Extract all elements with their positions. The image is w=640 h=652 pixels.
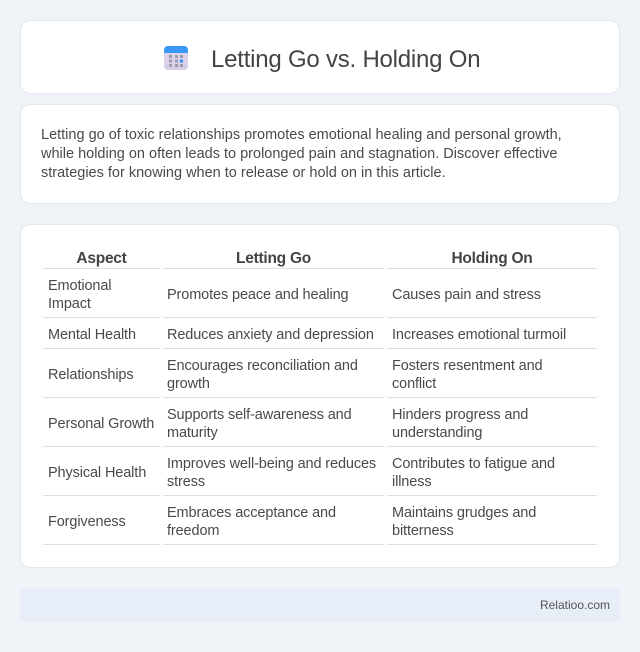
table header: Holding On: Holding On [451,250,532,267]
cell: Maintains grudges and [392,505,536,521]
cell: stress [167,474,205,490]
cell: conflict [392,376,436,392]
cell: Supports self-awareness and [167,407,352,423]
text block: introduction [41,127,562,181]
cell: illness [392,474,431,490]
cell: growth [167,376,210,392]
cell [392,456,555,490]
row: Mental Health: Mental Health [48,327,136,343]
cell [167,358,358,392]
row: Emotional Impact: Emotional [48,278,111,294]
cell [167,407,352,441]
cell [392,505,536,539]
row: Forgiveness: Forgiveness [48,514,126,530]
cell: Hinders progress and [392,407,528,423]
row: Relationships: Relationships [48,367,134,383]
panel: introduction [20,104,620,204]
panel: header [20,20,620,94]
cell [392,407,528,441]
cell: Contributes to fatigue and [392,456,555,472]
cell [167,456,376,490]
cell: understanding [392,425,482,441]
cell: maturity [167,425,218,441]
title: Letting Go vs. Holding On [211,46,480,73]
table header: Letting Go: Letting Go [236,250,311,267]
row: Emotional Impact: Impact [48,296,91,312]
cell [167,505,336,539]
text block: introduction: while holding on often leads to prolonged pain and stagnation. Discover effective [41,146,557,162]
cell: Fosters resentment and [392,358,542,374]
cell: bitterness [392,523,454,539]
cell: Causes pain and stress [392,287,541,303]
footer [20,588,620,622]
row: Emotional Impact [48,278,111,312]
cell: Encourages reconciliation and [167,358,358,374]
cell [392,358,542,392]
table header: Aspect: Aspect [76,250,127,267]
footer credit: Relatioo.com [540,598,610,612]
text block: introduction: Letting go of toxic relationships promotes emotional healing and personal growth, [41,127,562,143]
cell: freedom [167,523,219,539]
icon: calendar [164,46,188,70]
cell: Improves well-being and reduces [167,456,376,472]
cell: Embraces acceptance and [167,505,336,521]
panel: comparison table [20,224,620,568]
row: Physical Health: Physical Health [48,465,146,481]
text block: introduction: strategies for knowing when to release or hold on in this article. [41,165,446,181]
cell: Promotes peace and healing [167,287,348,303]
cell: Reduces anxiety and depression [167,327,374,343]
cell: Increases emotional turmoil [392,327,566,343]
row: Personal Growth: Personal Growth [48,416,154,432]
